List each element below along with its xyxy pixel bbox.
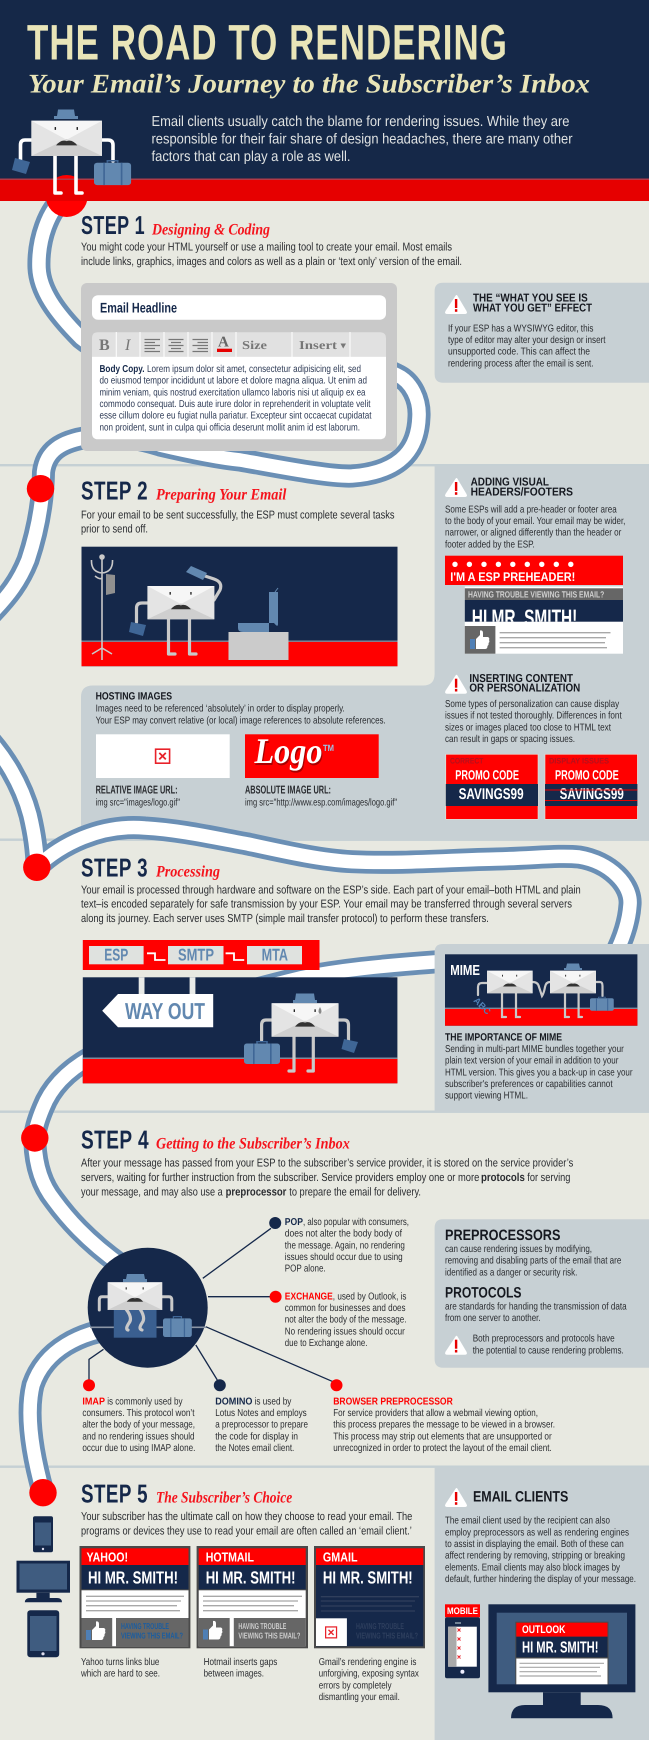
text: IMAP: and no rendering issues should [82,1431,194,1442]
icon: phone [33,1516,53,1552]
intro text [152,114,573,165]
callout: inserting content or personalization [445,673,622,745]
body copy: esse cillum dolore eu fugiat nulla pariatur. Excepteur sint occaecat cupidatat [100,411,372,422]
panel: email editor [81,283,397,451]
shirt in hand [129,622,146,636]
card: Yahoo: YAHOO! [86,1550,128,1565]
example: correct promo code [446,754,538,819]
callout: WYSIWYG effect: If your ESP has a WYSIWYG editor, this [448,323,594,334]
callout: email clients [445,1488,636,1585]
text: domino: DOMINO [215,1396,253,1407]
step 4 heading [81,1124,350,1154]
step 2 text: prior to send off. [81,523,148,535]
body copy [92,357,386,439]
MIME illustration: ABC [472,995,493,1017]
example: ESP preheader [445,556,623,585]
text: domino: is used by [255,1396,291,1407]
card: Hotmail: VIEWING THIS EMAIL? [238,1630,300,1640]
callout: preprocessors and protocols: PREPROCESSORS [445,1227,560,1244]
dot: browser preprocessor [330,1379,342,1391]
text: IMAP: IMAP [82,1396,105,1407]
callout: WYSIWYG effect: rendering process after the email is sent. [448,358,594,369]
callout: WYSIWYG effect: unsupported code. This can affect the [448,347,590,358]
callout: preprocessors and protocols: identified as a danger or security risk. [445,1267,577,1278]
MIME illustration: MIME [450,963,480,979]
step 4 text: protocols [481,1172,525,1184]
road stop: step 5 [29,1479,57,1506]
step 2 heading [81,475,287,505]
toolbar: B [99,337,110,354]
logo box: Logo [255,733,324,773]
icon: warning [445,1336,467,1355]
caption: Gmail: Gmail’s rendering engine is [319,1657,416,1668]
step 2 heading: STEP 2 [81,475,148,505]
text: POP [285,1217,409,1275]
step 2 text: For your email to be sent successfully, the ESP must complete several tasks [81,509,395,521]
device: mobile: MOBILE [447,1606,478,1617]
header band [0,0,649,179]
caption: Yahoo: Yahoo turns links blue [81,1657,160,1668]
road stop: step 4 [21,1124,48,1152]
callout: adding visual headers and footers: ADDING VISUAL [471,477,549,489]
icon: warning [445,1488,467,1507]
card: Hotmail [197,1546,308,1648]
panel: step 2 side and hosting background [81,466,649,840]
text: domino: Lotus Notes and employs [215,1408,307,1419]
toolbar: Size [242,338,268,352]
device: mobile [445,1604,480,1678]
device: desktop with Outlook [488,1604,635,1718]
step 2 heading: Preparing Your Email [155,486,287,503]
icon: header mascot [12,110,131,193]
broken image box [96,734,230,778]
diagram: ESP SMTP MTA: SMTP [178,946,214,965]
example: promo code with display issues: DISPLAY ISSUES [549,757,610,766]
callout: inserting content or personalization: OR PERSONALIZATION [469,683,580,695]
image url labels: ABSOLUTE IMAGE URL: [245,784,331,796]
logo box [245,731,379,778]
callout: WYSIWYG effect [445,292,606,369]
callout: inserting content or personalization: INSERTING CONTENT [469,673,573,685]
coat rack [91,555,115,660]
step 1 text [81,242,462,268]
road stop: step 1 [46,175,88,217]
panel: importance of MIME: subscriber's preferences or capabilities cannot [445,1079,613,1090]
text: browser preprocessor [333,1396,555,1454]
example: ESP preheader: I'M A ESP PREHEADER! [450,570,575,584]
step 5 heading: STEP 5 [81,1478,148,1508]
panel: preprocessors background [435,1219,649,1368]
callout: preprocessors and protocols: from one server to another. [445,1313,541,1324]
step 5 text: programs or devices they use to read your email are often called an ‘email client.’ [81,1525,412,1537]
connector lines [89,1228,335,1383]
text: exchange: due to Exchange alone. [285,1338,368,1349]
step 3 text: along its journey. Each server uses SMTP (simple mail transfer protocol) to perform these transfers. [81,913,489,925]
caption: Gmail: errors by completely [319,1680,392,1691]
section dividers [0,464,649,1468]
caption: Hotmail: Hotmail inserts gaps [204,1657,277,1668]
panel: importance of MIME: support viewing HTML. [445,1091,528,1102]
example: promo code with display issues: PROMO CODE [555,767,619,782]
callout: adding visual headers and footers [445,477,625,550]
road stop: step 2 [27,475,54,502]
card: Gmail: HAVING TROUBLE [356,1621,404,1631]
step 4 text [81,1158,573,1198]
card: Gmail [314,1546,425,1648]
toolbar [92,332,386,357]
toolbar: I [124,337,131,354]
headline field: Email Headline [100,300,177,316]
step 4 heading: Getting to the Subscriber’s Inbox [156,1135,350,1152]
callout: WYSIWYG effect: type of editor may alter your design or insert [448,335,606,346]
text: domino: the code for display in [215,1431,298,1442]
toolbar: Insert [299,338,337,352]
diagram: ESP SMTP MTA [83,940,320,970]
panel: hosting images [96,690,397,808]
text: POP: issues should occur due to using [285,1252,403,1263]
diagram: ESP SMTP MTA: ESP [104,946,128,965]
toolbar: A [218,335,229,351]
suitcase and box [228,588,288,660]
road path [0,196,630,1492]
text: domino [215,1396,308,1454]
text: IMAP: consumers. This protocol won’t [82,1408,195,1419]
example: email with preheader [465,586,623,654]
road stop: step 3 [23,854,50,881]
step 4 text: servers, waiting for further instruction from the subscriber. Service providers employ one or more [81,1172,479,1184]
panel: hosting images: Your ESP may convert relative (or local) image references to absolute references. [96,715,386,726]
card: Yahoo: HI MR. SMITH! [88,1567,178,1587]
illustration: way out scene [83,977,397,1083]
card: Yahoo: VIEWING THIS EMAIL? [121,1630,183,1640]
example: promo code with display issues [545,754,637,819]
card: Hotmail: HAVING TROUBLE [238,1621,287,1631]
character arms and legs [136,576,221,654]
device: desktop with Outlook: HI MR. SMITH! [522,1639,598,1656]
diagram: ESP SMTP MTA: MTA [262,946,288,965]
example: correct promo code: CORRECT [450,757,483,766]
caption: Gmail: dismantling your email. [319,1692,400,1703]
step 1 heading: Designing & Coding [151,221,270,238]
image url labels [96,784,397,808]
MIME illustration [445,954,637,1026]
headline field [92,295,386,320]
hub circle with character [88,1248,208,1368]
callout: adding visual headers and footers: HEADERS/FOOTERS [471,486,573,498]
intro text: responsible for their fair share of design headaches, there are many other [152,131,573,147]
text: browser preprocessor: For service providers that allow a webmail viewing option, [333,1408,538,1419]
text: IMAP [82,1396,195,1454]
caption: Hotmail [204,1657,277,1680]
step 5 text: Your subscriber has the ultimate call on how they choose to read your email. The [81,1511,412,1523]
way out sign: WAY OUT [125,998,205,1024]
step 3 heading: Processing [155,864,220,881]
icon: warning [445,478,467,497]
dot: exchange [270,1291,282,1303]
text: browser preprocessor: BROWSER PREPROCESSOR [333,1396,453,1407]
step 1 text: include links, graphics, images and colors as well as a plain or ‘text only’ version of the email. [81,256,462,268]
text: exchange [285,1291,406,1349]
text: browser preprocessor: this process prepares the message to be viewed in a browser. [333,1420,555,1431]
card: Gmail: VIEWING THIS EMAIL? [356,1630,418,1640]
step 5 heading [81,1478,292,1508]
panel: WYSIWYG background [435,283,649,383]
text: domino: the Notes email client. [215,1443,294,1454]
step 4 text: your message, and may also use a [81,1186,223,1198]
text: exchange: not alter the body of the message. [285,1315,406,1326]
text: browser preprocessor: unrecognized in order to protect the layout of the email client. [333,1443,552,1454]
panel: importance of MIME [435,944,649,1112]
callout: email clients: EMAIL CLIENTS [473,1489,568,1506]
text: exchange: , used by Outlook, is [333,1291,406,1302]
way out sign [102,977,213,1027]
image url labels: img src="images/logo.gif" [96,797,180,808]
step 4 text: preprocessor [226,1186,287,1198]
text: domino: a preprocessor to prepare [215,1420,308,1431]
text: POP: , also popular with consumers, [303,1217,409,1228]
caption: Gmail: unforgiving, exposing syntax [319,1669,419,1680]
text: exchange: No rendering issues should occur [285,1326,405,1337]
logo box: Logo [254,731,322,771]
caption: Hotmail: between images. [204,1669,264,1680]
callout: inserting content or personalization: can result in gaps or spacing issues. [445,734,575,745]
callout: email clients: The email client used by the recipient can also [445,1516,610,1527]
step 4 text: to prepare the email for delivery. [289,1186,421,1198]
body copy: minim veniam, quis nostrud exercitation ullamco laboris nisi ut aliquip ex ea [100,387,366,398]
callout: preprocessors and protocols [445,1227,627,1356]
text: IMAP: occur due to using IMAP alone. [82,1443,195,1454]
step 5 heading: The Subscriber’s Choice [156,1490,292,1507]
body copy: commodo consequat. Duis aute irure dolor in reprehenderit in voluptate velit [100,399,371,410]
logo box: TM [323,743,334,753]
card: Gmail: GMAIL [323,1550,358,1565]
body copy: non proident, sunt in culpa qui officia deserunt mollit anim id est laborum. [100,422,360,433]
step 3 heading [81,853,220,883]
body copy: Lorem ipsum dolor sit amet, consectetur adipisicing elit, sed [147,364,361,375]
card: Hotmail: HI MR. SMITH! [206,1567,296,1587]
text: IMAP: alter the body of your message, [82,1420,195,1431]
panel: hosting images: Images need to be referenced ‘absolutely’ in order to display properly. [96,704,345,715]
step 3 heading: STEP 3 [81,853,148,883]
icon: monitor [16,1561,70,1602]
intro text: Email clients usually catch the blame for rendering issues. While they are [152,114,570,130]
card: Hotmail: HOTMAIL [206,1550,254,1565]
intro text: factors that can play a role as well. [152,149,350,165]
panel: email clients background [435,1468,649,1740]
step 3 text [81,884,581,925]
header light edge [0,178,649,180]
caption: Gmail [319,1657,419,1703]
text: exchange: EXCHANGE [285,1291,333,1302]
example: correct promo code: PROMO CODE [455,767,519,782]
dot: IMAP [83,1379,95,1391]
callout: WYSIWYG effect: THE “WHAT YOU SEE IS [473,292,588,304]
step 4 text: for serving [527,1172,570,1184]
caption: Yahoo: which are hard to see. [80,1669,160,1680]
text: IMAP: is commonly used by [107,1396,182,1407]
image url labels: img src="http://www.esp.com/images/logo.gif" [245,797,397,808]
body copy: do eiusmod tempor incididunt ut labore et dolore magna aliqua. Ut enim ad [100,376,367,387]
text: exchange: common for businesses and does [285,1303,406,1314]
panel: hosting images: HOSTING IMAGES [96,690,172,702]
callout: WYSIWYG effect: WHAT YOU GET” EFFECT [473,302,592,314]
icon: warning [445,295,467,314]
subtitle: Your Email’s Journey to the Subscriber’s Inbox [28,69,590,99]
body copy: Body Copy. [100,364,145,375]
icon: tablet [27,1610,59,1657]
step 1 heading: STEP 1 [81,210,145,240]
text: POP: POP alone. [285,1264,326,1275]
example: correct promo code: SAVINGS99 [459,786,524,803]
callout: inserting content or personalization: sizes or images placed too close to HTML text [445,722,611,733]
dot: domino [214,1379,226,1391]
text: POP: POP [285,1217,303,1228]
text: browser preprocessor: This process may strip out elements that are unsupported or [333,1431,552,1442]
example: promo code with display issues: SAVINGS99 [560,786,624,803]
callout: preprocessors and protocols: can cause rendering issues by modifying, [445,1244,592,1255]
dot: POP [269,1217,281,1229]
traveling character [244,994,358,1071]
text: POP: the message. Again, no rendering [285,1240,405,1251]
text: POP: does not alter the body body of [285,1229,402,1240]
card: Gmail: HI MR. SMITH! [323,1567,413,1587]
step 5 text [81,1511,412,1537]
image url labels: RELATIVE IMAGE URL: [96,784,178,796]
step 1 text: You might code your HTML yourself or use a mailing tool to create your email. Most emails [81,242,452,254]
callout: preprocessors and protocols: Both preprocessors and protocols have [473,1334,615,1345]
example: email with preheader: HAVING TROUBLE VIEWING THIS EMAIL? [468,589,604,599]
callout: preprocessors and protocols: PROTOCOLS [445,1284,522,1301]
step 4 heading: STEP 4 [81,1124,149,1154]
step 2 text [81,509,395,535]
step 1 heading [81,210,270,240]
card: Yahoo [80,1546,190,1648]
card: Yahoo: HAVING TROUBLE [121,1621,169,1631]
icon: warning [445,675,467,694]
caption: Yahoo [80,1657,160,1680]
illustration: packing scene [82,547,398,666]
device: desktop with Outlook: OUTLOOK [522,1624,565,1636]
panel: importance of MIME: THE IMPORTANCE OF MIME [445,1031,562,1043]
callout: adding visual headers and footers: footer added by the ESP. [445,539,535,550]
red header band [0,179,649,201]
